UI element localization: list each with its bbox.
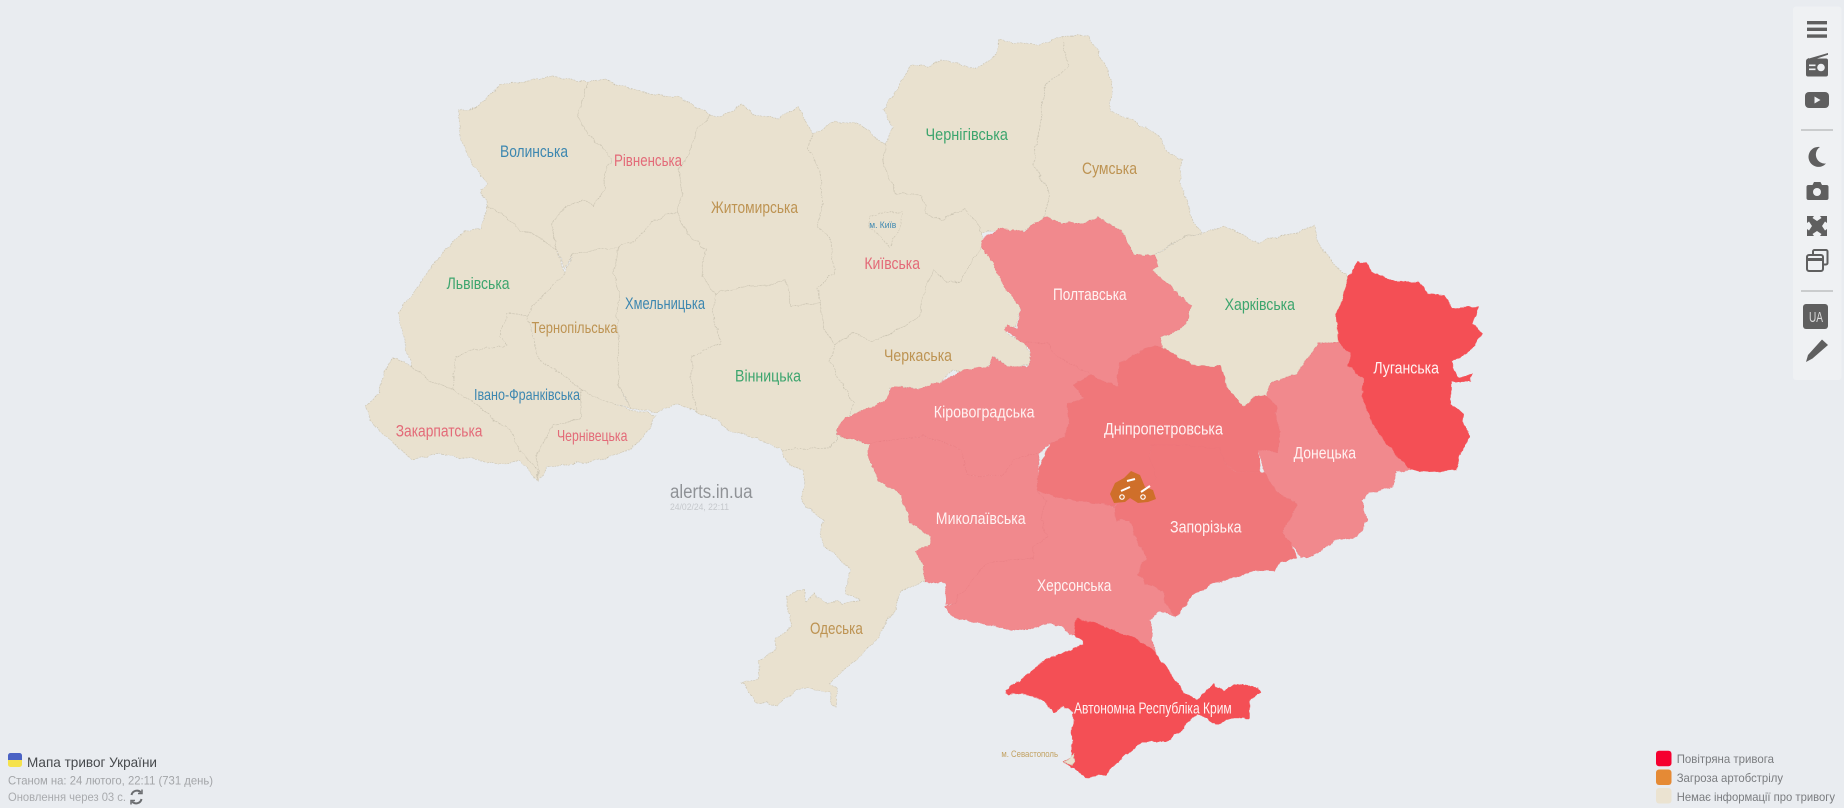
legend: [1656, 751, 1835, 804]
region shape: Poltava: [980, 217, 1191, 387]
update line: Оновлення через 03 с.: [8, 790, 126, 804]
region shape: Zaporizhzhia: [1115, 445, 1299, 617]
icon: Ukrainian flag: [8, 753, 22, 767]
watermark: alerts.in.ua: [670, 482, 753, 512]
label: Chernihiv: Чернігівська: [926, 125, 1008, 144]
region shape: Zakarpattia: [367, 357, 539, 482]
status line: Станом на: 24 лютого, 22:11 (731 день): [8, 774, 213, 788]
legend item: air alert: Повітряна тривога: [1677, 752, 1774, 766]
region shape: Ivano-Frankivsk: [454, 313, 581, 482]
label: Kharkiv: Харківська: [1225, 295, 1295, 314]
region shape: Sevastopol: [1064, 754, 1076, 765]
label: Ivano-Frankivsk: Івано-Франківська: [474, 387, 580, 404]
label: Chernivtsi: Чернівецька: [557, 428, 627, 445]
legend item: no info: Немає інформації про тривогу: [1677, 790, 1835, 804]
divider: [1801, 130, 1833, 291]
label: Khmelnytskyi: Хмельницька: [625, 294, 705, 313]
region shape: Sumy: [1033, 35, 1202, 255]
label: Volyn: Волинська: [500, 142, 568, 161]
region shape: Kherson: [945, 490, 1175, 657]
region shape: Kharkiv: [1152, 225, 1349, 407]
region shape: Crimea: [1006, 618, 1261, 778]
icon: camera: [1806, 182, 1828, 200]
label: Zakarpattia: Закарпатська: [396, 422, 483, 440]
label: Dnipropetrovsk: Дніпропетровська: [1104, 420, 1223, 438]
label: Vinnytsia: Вінницька: [735, 366, 801, 386]
region shape: Zhytomyr: [677, 105, 834, 307]
label: Kyiv city: м. Київ: [869, 220, 896, 231]
region shape: Odesa: [741, 435, 931, 707]
region shape: Kyiv city: [868, 212, 902, 248]
icon: fullscreen arrows: [1807, 216, 1827, 236]
label: Kirovohrad: Кіровоградська: [934, 402, 1035, 422]
region shape: Mykolaiv: [868, 437, 1048, 605]
watermark: alerts.in.ua: 24/02/24, 22:11: [670, 502, 729, 512]
icon: windows: [1807, 250, 1828, 271]
icon: dark mode moon: [1808, 147, 1826, 167]
region shape: Kirovohrad: [837, 342, 1091, 477]
label: Lviv: Львівська: [447, 274, 510, 293]
region shape: Khmelnytskyi: [614, 212, 720, 412]
region shape: Volyn: [459, 77, 611, 250]
region shape: Cherkasy: [830, 247, 1031, 430]
label: Mykolaiv: Миколаївська: [936, 509, 1026, 528]
label: Rivne: Рівненська: [614, 151, 682, 170]
legend item: artillery threat: Загроза артобстрілу: [1677, 771, 1783, 785]
region name labels: [396, 125, 1439, 760]
label: Donetsk: Донецька: [1294, 444, 1356, 462]
icon: pencil: [1806, 340, 1828, 362]
map of Ukraine regions: [367, 35, 1483, 778]
label: Sevastopol: м. Севастополь: [1001, 749, 1058, 760]
label: Sumy: Сумська: [1082, 159, 1137, 178]
language button: [1803, 304, 1828, 329]
artillery threat area: [1110, 471, 1156, 503]
region shape: Vinnytsia: [691, 280, 853, 450]
icon: refresh: [131, 790, 142, 804]
language button: UA: [1809, 309, 1823, 326]
region shape: Chernivtsi: [536, 390, 655, 482]
label: Odesa: Одеська: [810, 619, 863, 638]
label: Zhytomyr: Житомирська: [711, 198, 798, 217]
region shape: Ternopil: [527, 247, 631, 408]
icon: menu: [1807, 21, 1827, 38]
heading: Мапа тривог України: [27, 754, 157, 770]
label: Crimea: Автономна Республіка Крим: [1074, 700, 1232, 718]
label: Luhansk: Луганська: [1373, 358, 1439, 378]
label: Cherkasy: Черкаська: [884, 346, 952, 365]
region shape: Donetsk: [1258, 343, 1412, 558]
region shape: Dnipropetrovsk: [1037, 347, 1280, 507]
label: Kherson: Херсонська: [1037, 576, 1112, 595]
toolbar panel: [1793, 6, 1842, 380]
icon: radio: [1806, 53, 1828, 76]
title block: [8, 753, 213, 804]
region shape: Luhansk: [1336, 262, 1483, 472]
region shape: Kyiv oblast: [808, 122, 982, 345]
label: Poltava: Полтавська: [1053, 285, 1127, 304]
label: Zaporizhzhia: Запорізька: [1170, 518, 1242, 536]
label: Ternopil: Тернопільська: [532, 320, 618, 337]
region shape: Rivne: [552, 80, 711, 268]
icon: video: [1805, 92, 1829, 108]
region shape: Chernihiv: [883, 37, 1069, 233]
watermark: alerts.in.ua: alerts.in.ua: [670, 482, 753, 503]
region shape: Lviv: [398, 207, 565, 390]
label: Kyiv oblast: Київська: [864, 254, 920, 273]
